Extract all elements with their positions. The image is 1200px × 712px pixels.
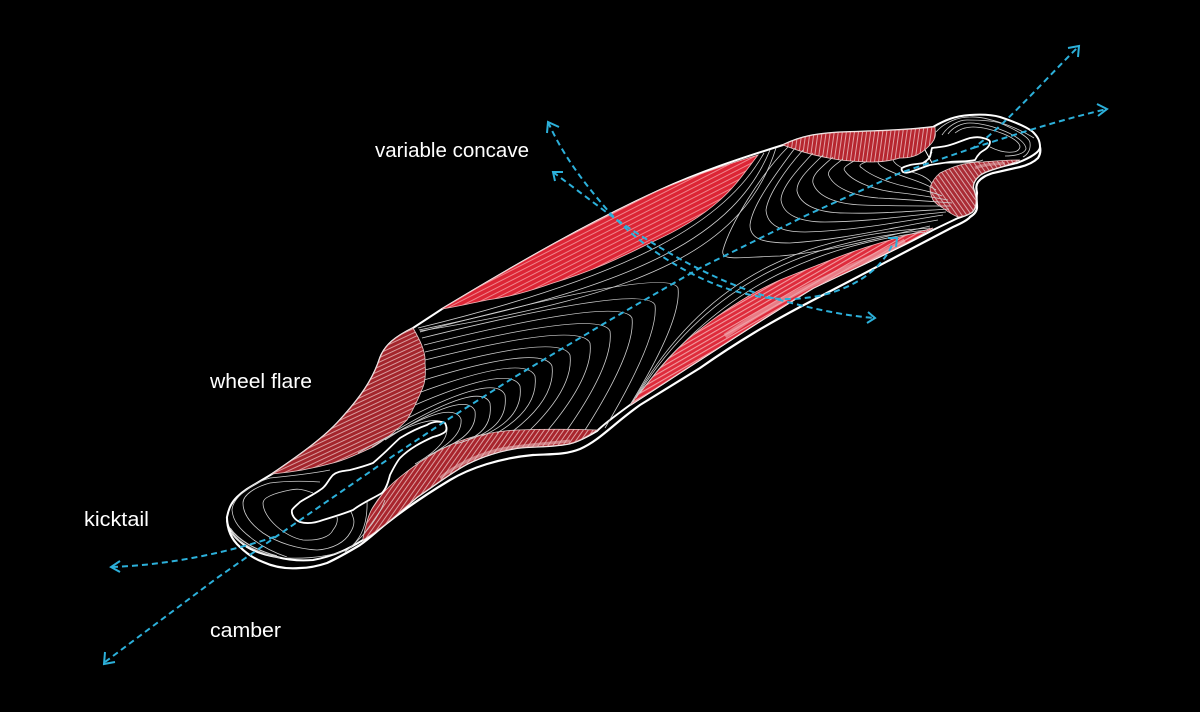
label: kicktail: kicktail xyxy=(84,509,149,531)
axis: camber xyxy=(105,47,1078,662)
axis: kicktail left xyxy=(112,536,277,567)
front truck slot xyxy=(902,137,990,173)
arrowhead: concave lower xyxy=(553,172,563,181)
arrowhead: kicktail front xyxy=(1097,104,1107,116)
rear truck slot xyxy=(292,422,446,523)
red zone: nose, upper xyxy=(783,127,935,162)
pale highlight at nose lower zone xyxy=(975,163,1005,168)
arrowhead: kicktail rear xyxy=(111,561,120,572)
arrowhead: camber front xyxy=(1068,46,1079,57)
contour lines: nose xyxy=(932,117,1034,163)
red zone: nose, lower xyxy=(930,160,1020,217)
arrowhead: concave rail xyxy=(888,238,897,247)
label: variable concave: variable concave xyxy=(375,140,529,162)
red zone: concave, upper rail xyxy=(442,155,758,309)
pale highlight along lower rail edge xyxy=(725,241,905,336)
axes: dashed blue flex arrows xyxy=(104,46,1107,664)
skateboard deck xyxy=(227,115,1040,568)
contour lines: front half xyxy=(723,147,952,258)
arrowhead: concave right xyxy=(867,312,875,323)
deck top surface xyxy=(227,115,1040,560)
contour lines: rear half xyxy=(358,148,930,464)
axis: kicktail right xyxy=(973,109,1107,148)
label: wheel flare: wheel flare xyxy=(209,371,312,393)
pale highlight along rear lower zone edge xyxy=(440,441,570,478)
label: camber: camber xyxy=(210,620,281,642)
axis: concave, short arc xyxy=(553,172,875,318)
axis: concave, long arc xyxy=(548,122,893,299)
contour lines: kicktail xyxy=(230,470,385,558)
arrowhead: concave upper xyxy=(547,122,559,133)
slot cross mark xyxy=(925,150,932,164)
arrowhead: camber rear xyxy=(104,652,115,664)
deck underside outline xyxy=(227,147,1040,568)
red zone: concave, lower rail xyxy=(630,228,933,405)
red zone: wheel flare, rear upper xyxy=(272,328,425,474)
red zone: wheel flare, rear lower xyxy=(363,429,597,540)
